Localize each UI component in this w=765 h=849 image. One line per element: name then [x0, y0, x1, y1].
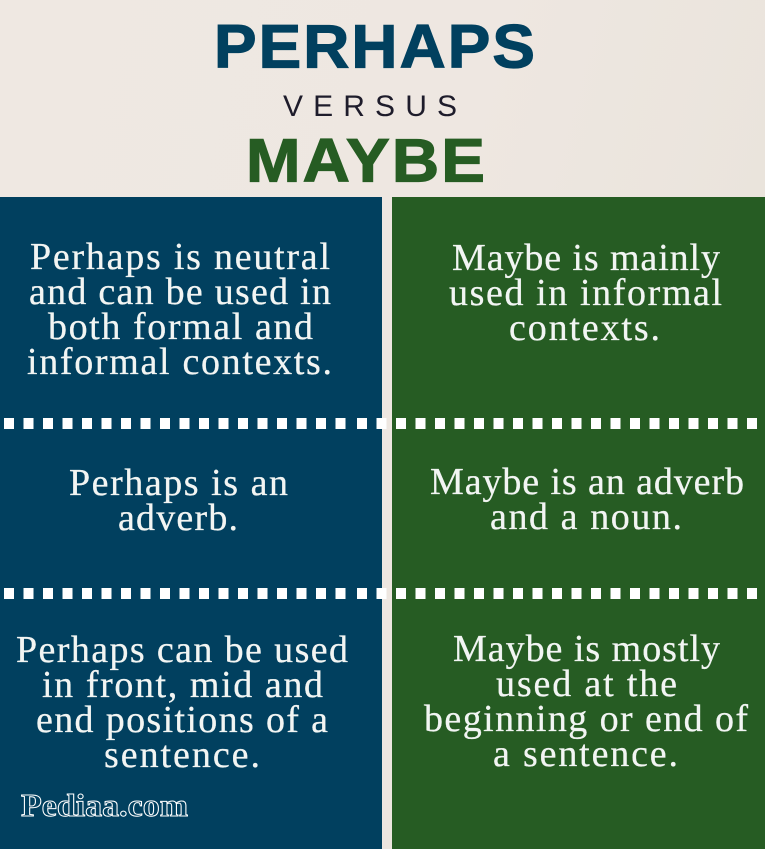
text: perhaps register: informal contexts.	[27, 341, 332, 383]
text: maybe position: Maybe is mostly	[453, 628, 720, 670]
text: perhaps part of speech: adverb.	[118, 497, 238, 539]
text: perhaps part of speech: Perhaps is an	[69, 462, 288, 504]
title block	[214, 12, 537, 194]
divider: first row	[4, 418, 757, 429]
text: perhaps part of speech	[69, 462, 288, 539]
text: perhaps position: sentence.	[104, 734, 260, 776]
text: maybe part of speech	[430, 461, 744, 538]
text: maybe register: contexts.	[509, 307, 660, 349]
text: maybe position: beginning or end of	[424, 698, 748, 740]
text: perhaps register: both formal and	[48, 306, 313, 348]
panel: perhaps column	[0, 197, 382, 849]
text: maybe register: used in informal	[449, 272, 722, 314]
divider: second row	[4, 588, 757, 599]
panel: maybe column	[392, 197, 765, 849]
heading: VERSUS: VERSUS	[283, 90, 457, 123]
text: perhaps register	[27, 236, 332, 383]
logo: Pediaa.com: Pediaa.com	[21, 787, 188, 823]
text: maybe position: a sentence.	[493, 733, 678, 775]
text: maybe part of speech: Maybe is an adverb	[430, 461, 744, 503]
text: perhaps position: Perhaps can be used	[16, 629, 348, 671]
text: perhaps position: end positions of a	[36, 699, 328, 741]
text: perhaps register: and can be used in	[29, 271, 331, 313]
text: perhaps position	[16, 629, 348, 776]
heading: MAYBE: MAYBE	[246, 126, 487, 194]
text: perhaps position: in front, mid and	[42, 664, 323, 706]
text: maybe register: Maybe is mainly	[452, 237, 720, 279]
text: maybe register	[449, 237, 722, 349]
text: perhaps register: Perhaps is neutral	[30, 236, 330, 278]
text: maybe position	[424, 628, 748, 775]
heading: PERHAPS: PERHAPS	[214, 12, 537, 80]
text: maybe position: used at the	[496, 663, 677, 705]
text: maybe part of speech: and a noun.	[490, 496, 682, 538]
